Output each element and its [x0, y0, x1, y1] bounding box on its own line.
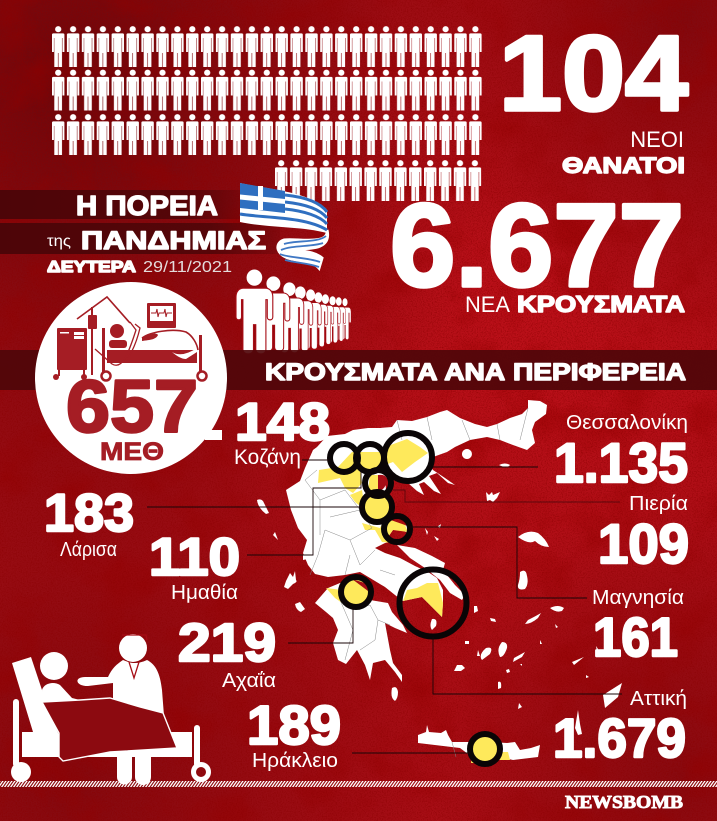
new cases number: 6.677	[390, 180, 684, 312]
yellow regions	[318, 439, 510, 763]
deaths number: 104	[499, 13, 688, 133]
title banner	[0, 190, 280, 276]
region borders	[305, 408, 528, 757]
label: Pieria: 109	[598, 512, 689, 575]
title banner: της	[47, 233, 71, 250]
label: Attica: Αττική	[630, 688, 687, 710]
new cases label	[465, 291, 685, 317]
Crete	[418, 725, 540, 760]
Peloponnese	[315, 580, 407, 682]
ICU number: 657	[66, 365, 198, 448]
label: Pieria: Πιερία	[629, 493, 688, 515]
map of Greece	[257, 400, 622, 764]
pictogram: 104 deaths as people	[52, 26, 483, 201]
label: Thessaloniki: Θεσσαλονίκη	[566, 412, 688, 434]
title banner: ΔΕΥΤΕΡΑ	[47, 259, 137, 276]
icon: ICU bed	[53, 297, 206, 380]
deaths label	[562, 127, 685, 178]
mainland	[286, 400, 547, 617]
label: Imathia: Ημαθία	[171, 582, 238, 604]
label: Magnesia: 161	[593, 606, 678, 668]
title banner: 29/11/2021	[143, 259, 232, 276]
new cases label: ΝΕΑ	[465, 292, 510, 317]
sea cut-outs	[352, 579, 371, 591]
title banner: Η ΠΟΡΕΙΑ	[76, 190, 218, 221]
section banner: ΚΡΟΥΣΜΑΤΑ ΑΝΑ ΠΕΡΙΦΕΡΕΙΑ	[265, 359, 686, 386]
deaths label: ΘΑΝΑΤΟΙ	[562, 153, 685, 178]
section banner	[0, 350, 717, 390]
leader lines	[147, 460, 622, 753]
panel: ICU badge	[35, 282, 227, 474]
deaths label: ΝΕΟΙ	[630, 127, 684, 152]
label: Imathia: 110	[149, 528, 240, 587]
label: Achaia	[178, 613, 276, 692]
label: Larisa: Λάρισα	[60, 539, 117, 561]
label: Larisa: 183	[44, 484, 134, 543]
highlight rings	[330, 433, 500, 764]
logo: NEWSBOMB	[565, 792, 683, 812]
islands	[257, 449, 622, 735]
label: Attica: 1.679	[553, 707, 686, 769]
icon: patient and doctor	[11, 634, 208, 785]
ICU label: ΜΕΘ	[100, 438, 164, 466]
label: Heraklion: 189	[247, 694, 341, 756]
title banner: ΠΑΝΔΗΜΙΑΣ	[81, 227, 266, 255]
label: Kozani: Κοζάνη	[234, 446, 301, 469]
label: Achaia: Αχαΐα	[222, 670, 276, 692]
hatched footer strip	[0, 781, 717, 787]
new cases label: ΚΡΟΥΣΜΑΤΑ	[517, 291, 685, 317]
icon: Greek flag ribbon	[240, 183, 328, 268]
label: Achaia: 219	[178, 613, 276, 673]
icon: queue of people	[236, 269, 351, 354]
label: Magnesia: Μαγνησία	[592, 587, 684, 609]
label: Kozani: 148	[235, 393, 330, 452]
label: Heraklion: Ηράκλειο	[252, 750, 338, 772]
label: Thessaloniki: 1.135	[554, 431, 688, 494]
